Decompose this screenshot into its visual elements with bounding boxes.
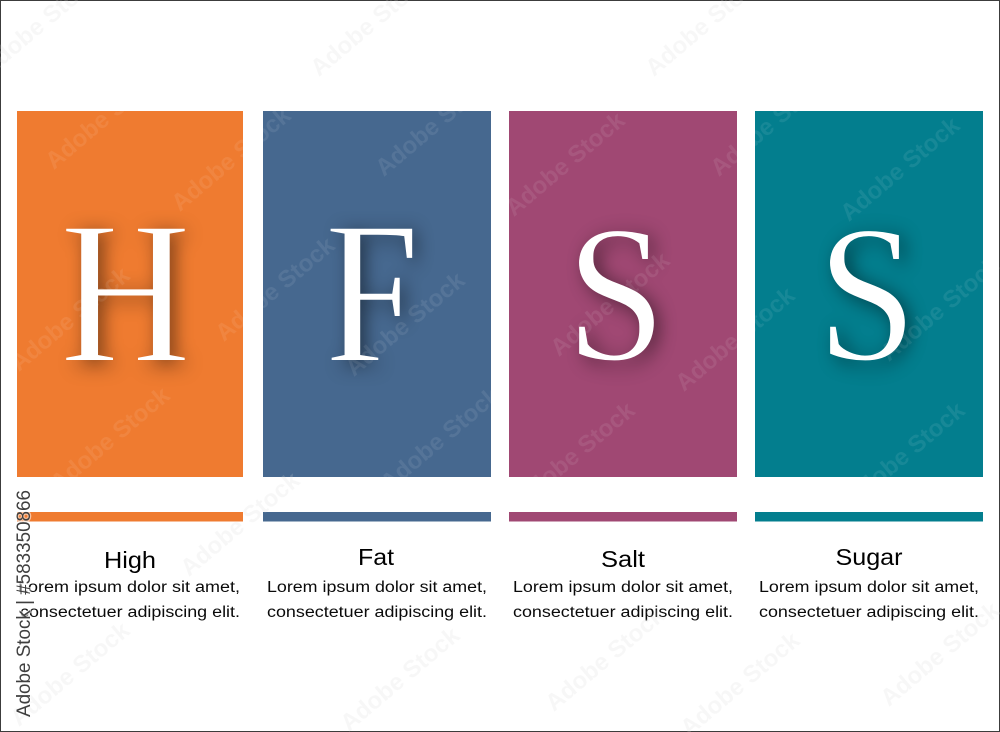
- letter S: S: [567, 186, 665, 403]
- heading: Salt: Salt: [601, 546, 646, 572]
- watermarks: Adobe Stock: [545, 246, 676, 362]
- description: Sugar: [759, 579, 979, 621]
- description: Sugar: Lorem ipsum dolor sit amet,: [759, 579, 979, 596]
- description: Salt: [513, 579, 733, 621]
- description: Salt: Lorem ipsum dolor sit amet,: [513, 579, 733, 596]
- letter S: S: [818, 186, 916, 403]
- watermarks: Adobe Stock: [5, 261, 136, 377]
- watermarks: Adobe Stock: [510, 396, 641, 512]
- panel: S for Sugar: [755, 111, 983, 477]
- column: Sugar: [755, 512, 983, 621]
- watermarks: Adobe Stock: [705, 66, 836, 182]
- watermarks: Adobe Stock: [500, 106, 631, 222]
- column: Fat: [263, 512, 491, 621]
- watermarks: Adobe Stock: [370, 66, 501, 182]
- watermarks: Adobe Stock: [40, 59, 171, 175]
- description: High: [18, 579, 240, 621]
- panel: H for High: [17, 111, 243, 477]
- panel: S for Salt: [509, 111, 737, 477]
- description: Fat: consectetuer adipiscing elit.: [267, 604, 487, 621]
- watermarks: Adobe Stock: [835, 111, 966, 227]
- description: Fat: [267, 579, 487, 621]
- description: High: Lorem ipsum dolor sit amet,: [18, 579, 240, 596]
- watermarks: Adobe Stock: [166, 101, 297, 217]
- watermarks: Adobe Stock: [5, 616, 136, 732]
- watermarks: Adobe Stock: [175, 466, 306, 582]
- heading: High: High: [104, 547, 156, 573]
- watermarks: Adobe Stock: [45, 381, 176, 497]
- panel: F for Fat: [263, 111, 491, 477]
- letter H: H: [61, 179, 190, 406]
- watermarks: Adobe Stock: [840, 396, 971, 512]
- stock id label: Adobe Stock | #583350866: [14, 490, 35, 717]
- heading: Sugar: Sugar: [836, 544, 903, 570]
- description: Fat: Lorem ipsum dolor sit amet,: [267, 579, 487, 596]
- column: High: [17, 512, 243, 621]
- watermarks: Adobe Stock: [210, 231, 341, 347]
- watermarks: Adobe Stock: [375, 381, 506, 497]
- heading: Fat: Fat: [358, 544, 395, 570]
- watermarks: Adobe Stock: [340, 266, 471, 382]
- letter F: F: [326, 180, 418, 407]
- description: High: consectetuer adipiscing elit.: [20, 604, 240, 621]
- description: Sugar: consectetuer adipiscing elit.: [759, 604, 979, 621]
- watermarks: Adobe Stock: [540, 601, 671, 717]
- watermarks: Adobe Stock: [670, 281, 801, 397]
- description: Salt: consectetuer adipiscing elit.: [513, 604, 733, 621]
- column: Salt: [509, 512, 737, 621]
